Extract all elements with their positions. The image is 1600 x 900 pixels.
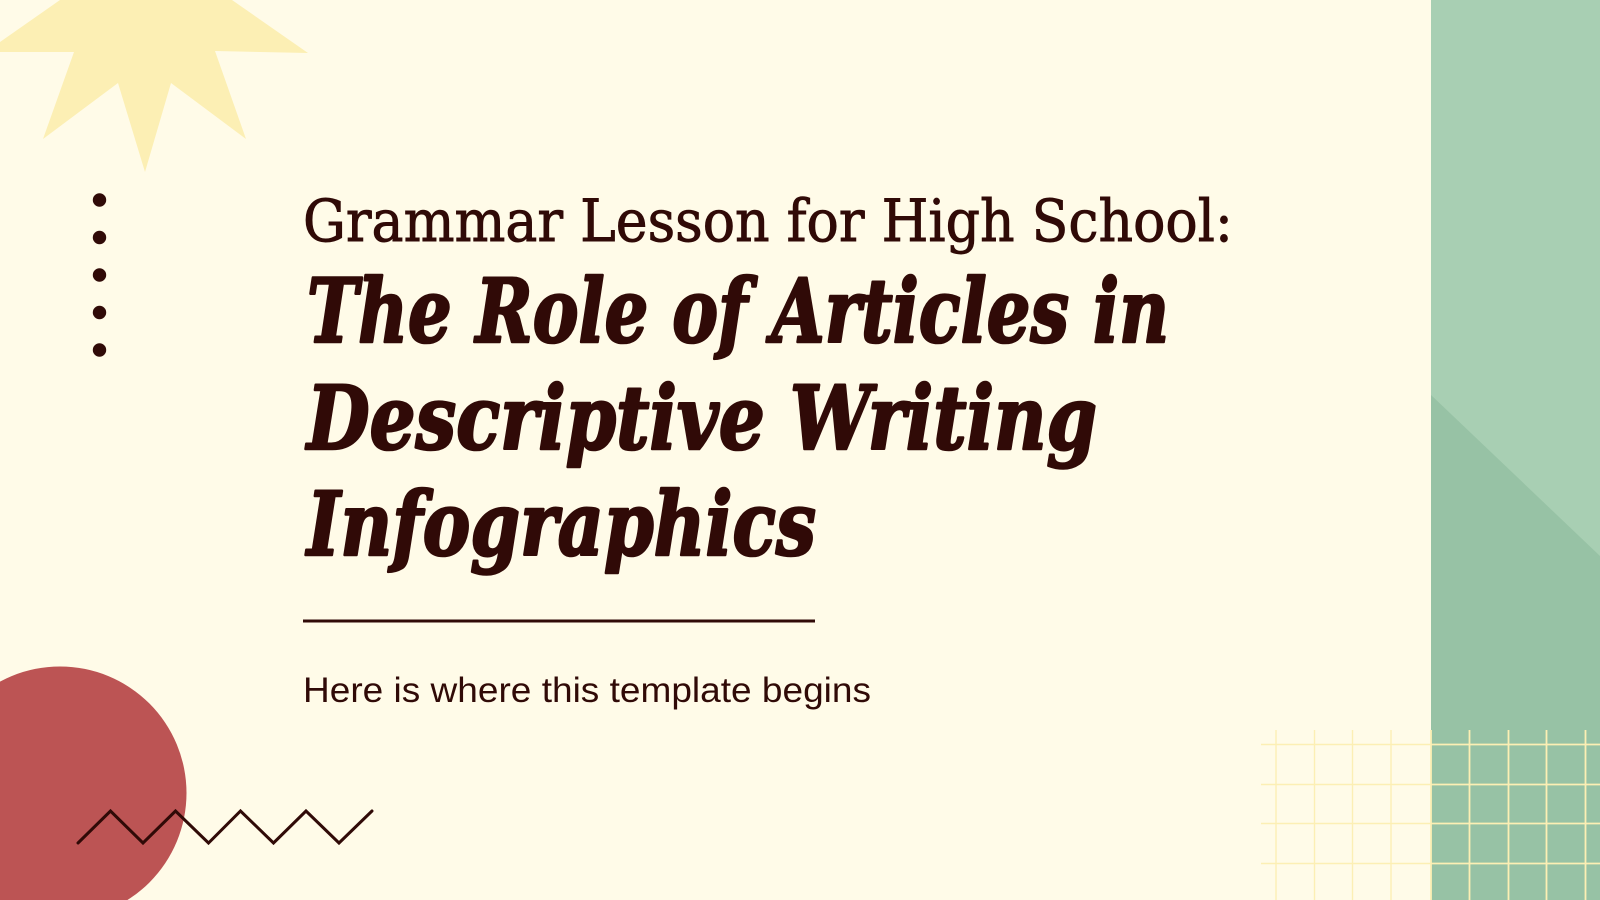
decoration: grid lines <box>1261 730 1600 900</box>
heading: lesson label: Grammar Lesson for High School: <box>303 187 1233 255</box>
title <box>305 259 1169 576</box>
title: Descriptive Writing <box>305 366 1097 470</box>
title: Infographics <box>305 472 816 576</box>
icon: yellow star burst <box>0 0 308 172</box>
divider rule <box>303 620 815 622</box>
decoration: vertical dots <box>93 193 106 357</box>
subtitle: Here is where this template begins <box>303 671 871 710</box>
decoration: red circle <box>0 666 186 900</box>
title: The Role of Articles in <box>307 259 1169 363</box>
decoration: zigzag line <box>78 811 372 843</box>
panel: green side band <box>1431 0 1600 900</box>
